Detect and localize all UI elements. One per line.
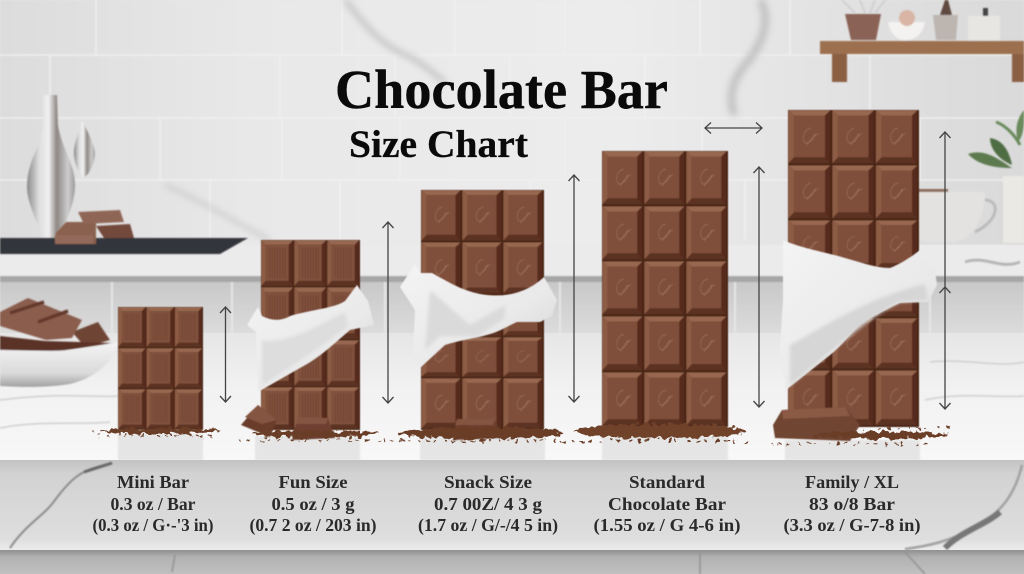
label: Mini Bar: Mini Bar	[117, 472, 189, 492]
worktop veins	[0, 361, 1024, 428]
title: Chocolate Bar	[335, 59, 668, 120]
arrow: Standard height	[754, 167, 764, 407]
icon: coffee cup	[915, 189, 995, 242]
bar: Family / XL	[773, 110, 937, 441]
arrow: width marker	[705, 122, 762, 134]
wrapper: Snack Size	[400, 264, 557, 368]
label: Standard Chocolate Bar: (1.55 oz / G 4-6 in)	[594, 515, 741, 535]
wrapper: Fun Size	[247, 285, 374, 392]
label: Fun Size	[250, 472, 377, 535]
cocoa crumbs: Mini Bar	[92, 428, 220, 436]
arrow: Snack Size height	[568, 175, 580, 402]
back counter and cabinets	[0, 245, 1024, 334]
subtitle: Size Chart	[349, 123, 528, 166]
label: Snack Size: 0.7 00Z/ 4 3 g	[434, 494, 542, 514]
label: Mini Bar: (0.3 oz / G·-'3 in)	[92, 515, 214, 535]
label: Snack Size	[418, 472, 558, 535]
icon: potted plant	[968, 110, 1024, 243]
arrow: Mini Bar height	[220, 307, 231, 402]
bar: Snack Size	[400, 190, 557, 440]
tiled wall	[0, 0, 1024, 245]
label: Family / XL: 83 o/8 Bar	[809, 494, 895, 514]
label: Fun Size: (0.7 2 oz / 203 in)	[250, 515, 377, 535]
label: Mini Bar: 0.3 oz / Bar	[110, 494, 196, 514]
label: Mini Bar	[92, 472, 214, 535]
label: Snack Size: Snack Size	[444, 472, 532, 492]
wall marble veins	[165, 0, 765, 240]
wrapper: Family / XL	[780, 240, 937, 390]
bar reflections	[118, 434, 920, 460]
label: Family / XL: (3.3 oz / G-7-8 in)	[784, 515, 921, 535]
broken piece: Snack Size	[453, 419, 500, 440]
bar: Standard Chocolate Bar	[602, 151, 728, 427]
cocoa crumbs: Standard	[572, 424, 752, 441]
label: Fun Size: Fun Size	[278, 472, 348, 492]
icon: chocolates on black tray	[0, 210, 248, 254]
marble worktop	[0, 333, 1024, 461]
front edge veins	[10, 463, 1022, 574]
icon: shelf cups and bowls	[842, 0, 1000, 40]
icon: bowl of chocolate	[0, 298, 118, 387]
label: Snack Size: (1.7 oz / G/-/4 5 in)	[418, 515, 558, 535]
cocoa crumbs: Family / XL	[770, 428, 950, 444]
arrow: Family / XL height	[940, 132, 950, 409]
arrow: Fun Size height	[382, 222, 394, 403]
label: Family / XL	[784, 472, 921, 535]
cocoa crumbs: Snack Size	[392, 427, 570, 441]
broken pieces: Fun Size	[241, 405, 335, 440]
label: Fun Size: 0.5 oz / 3 g	[272, 494, 355, 514]
lower panel	[0, 550, 1024, 574]
counter front edge	[0, 460, 1024, 550]
cocoa crumbs: Fun Size	[240, 430, 392, 440]
icon: wooden shelf	[820, 0, 1024, 82]
label: Standard Chocolate Bar: Chocolate Bar	[608, 494, 726, 514]
broken piece: Family / XL	[773, 407, 860, 441]
bar: Fun Size	[241, 240, 374, 440]
label: Standard Chocolate Bar: Standard	[629, 472, 705, 492]
bar: Mini Bar	[118, 307, 203, 430]
icon: silver vases	[27, 95, 95, 240]
label: Standard Chocolate Bar	[594, 472, 741, 535]
label: Family / XL: Family / XL	[805, 472, 899, 492]
